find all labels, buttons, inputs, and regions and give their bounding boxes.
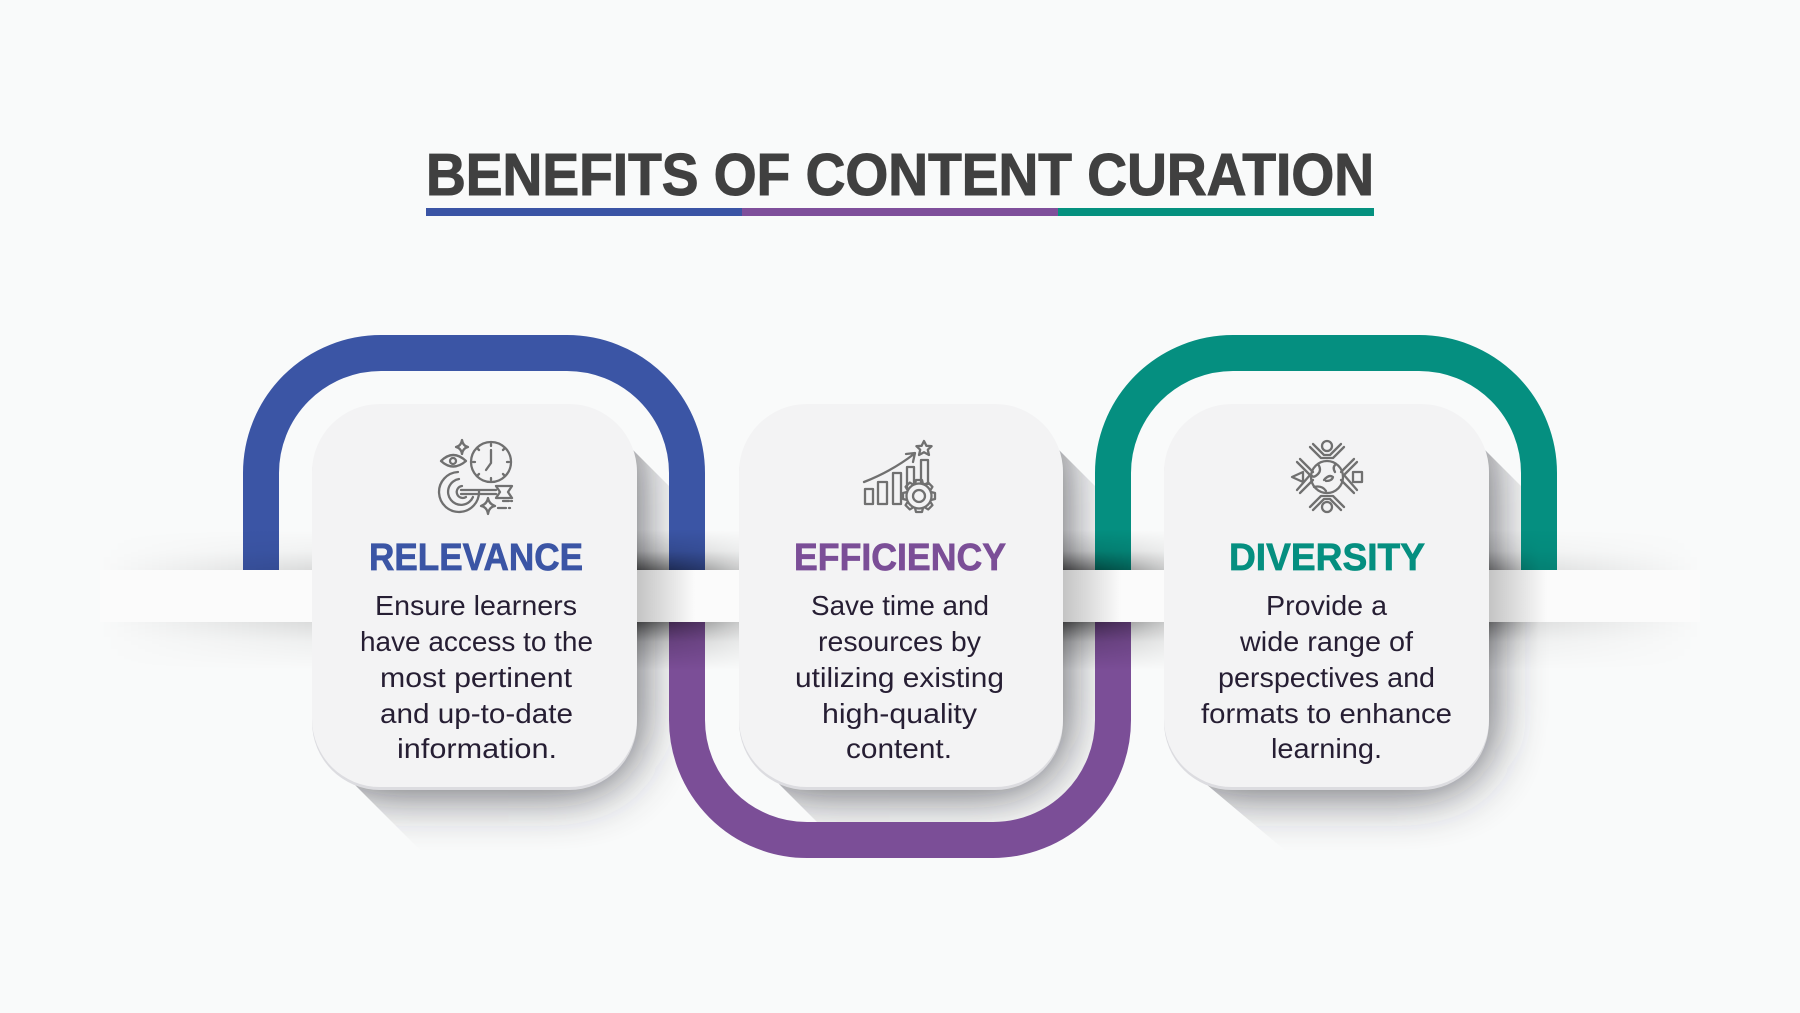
icon: globe with figures and shapes [1292, 441, 1362, 512]
text: diversity description: Provide a [1266, 590, 1387, 621]
title underline [426, 208, 1374, 216]
arch: blue [261, 353, 687, 570]
text: relevance description: information. [397, 733, 557, 764]
text: diversity description [1201, 590, 1452, 764]
text: diversity description: learning. [1271, 733, 1382, 764]
long shadows of the cards [312, 404, 1489, 790]
text: relevance description: Ensure learners [375, 590, 577, 621]
horizontal band [100, 570, 1700, 622]
panel: efficiency [739, 404, 1063, 790]
text: relevance description [360, 590, 593, 764]
text: diversity description: wide range of [1239, 626, 1413, 657]
text: diversity description: perspectives and [1218, 662, 1435, 693]
text: relevance description: have access to the [360, 626, 593, 657]
text: relevance description: most pertinent [380, 662, 572, 693]
band shadow [159, 536, 1646, 664]
text: relevance description: and up-to-date [380, 698, 573, 729]
icon: target, clock and eye [439, 440, 512, 514]
text: efficiency description [795, 590, 1004, 764]
text: diversity description: formats to enhance [1201, 698, 1452, 729]
panel: diversity [1164, 404, 1489, 790]
title: BENEFITS OF CONTENT CURATION [426, 142, 1374, 208]
heading: diversity: DIVERSITY [1229, 537, 1425, 579]
panel: relevance [312, 404, 637, 790]
heading: efficiency: EFFICIENCY [794, 537, 1006, 579]
arch: purple [687, 622, 1113, 840]
icon: growth chart and gear [864, 441, 935, 512]
text: efficiency description: high-quality [822, 698, 977, 729]
text: efficiency description: content. [846, 733, 952, 764]
text: efficiency description: resources by [818, 626, 981, 657]
heading: relevance: RELEVANCE [369, 537, 583, 579]
text: efficiency description: utilizing existing [795, 662, 1004, 693]
arch: teal [1113, 353, 1539, 570]
text: efficiency description: Save time and [811, 590, 989, 621]
card shadows on band [637, 570, 1547, 622]
